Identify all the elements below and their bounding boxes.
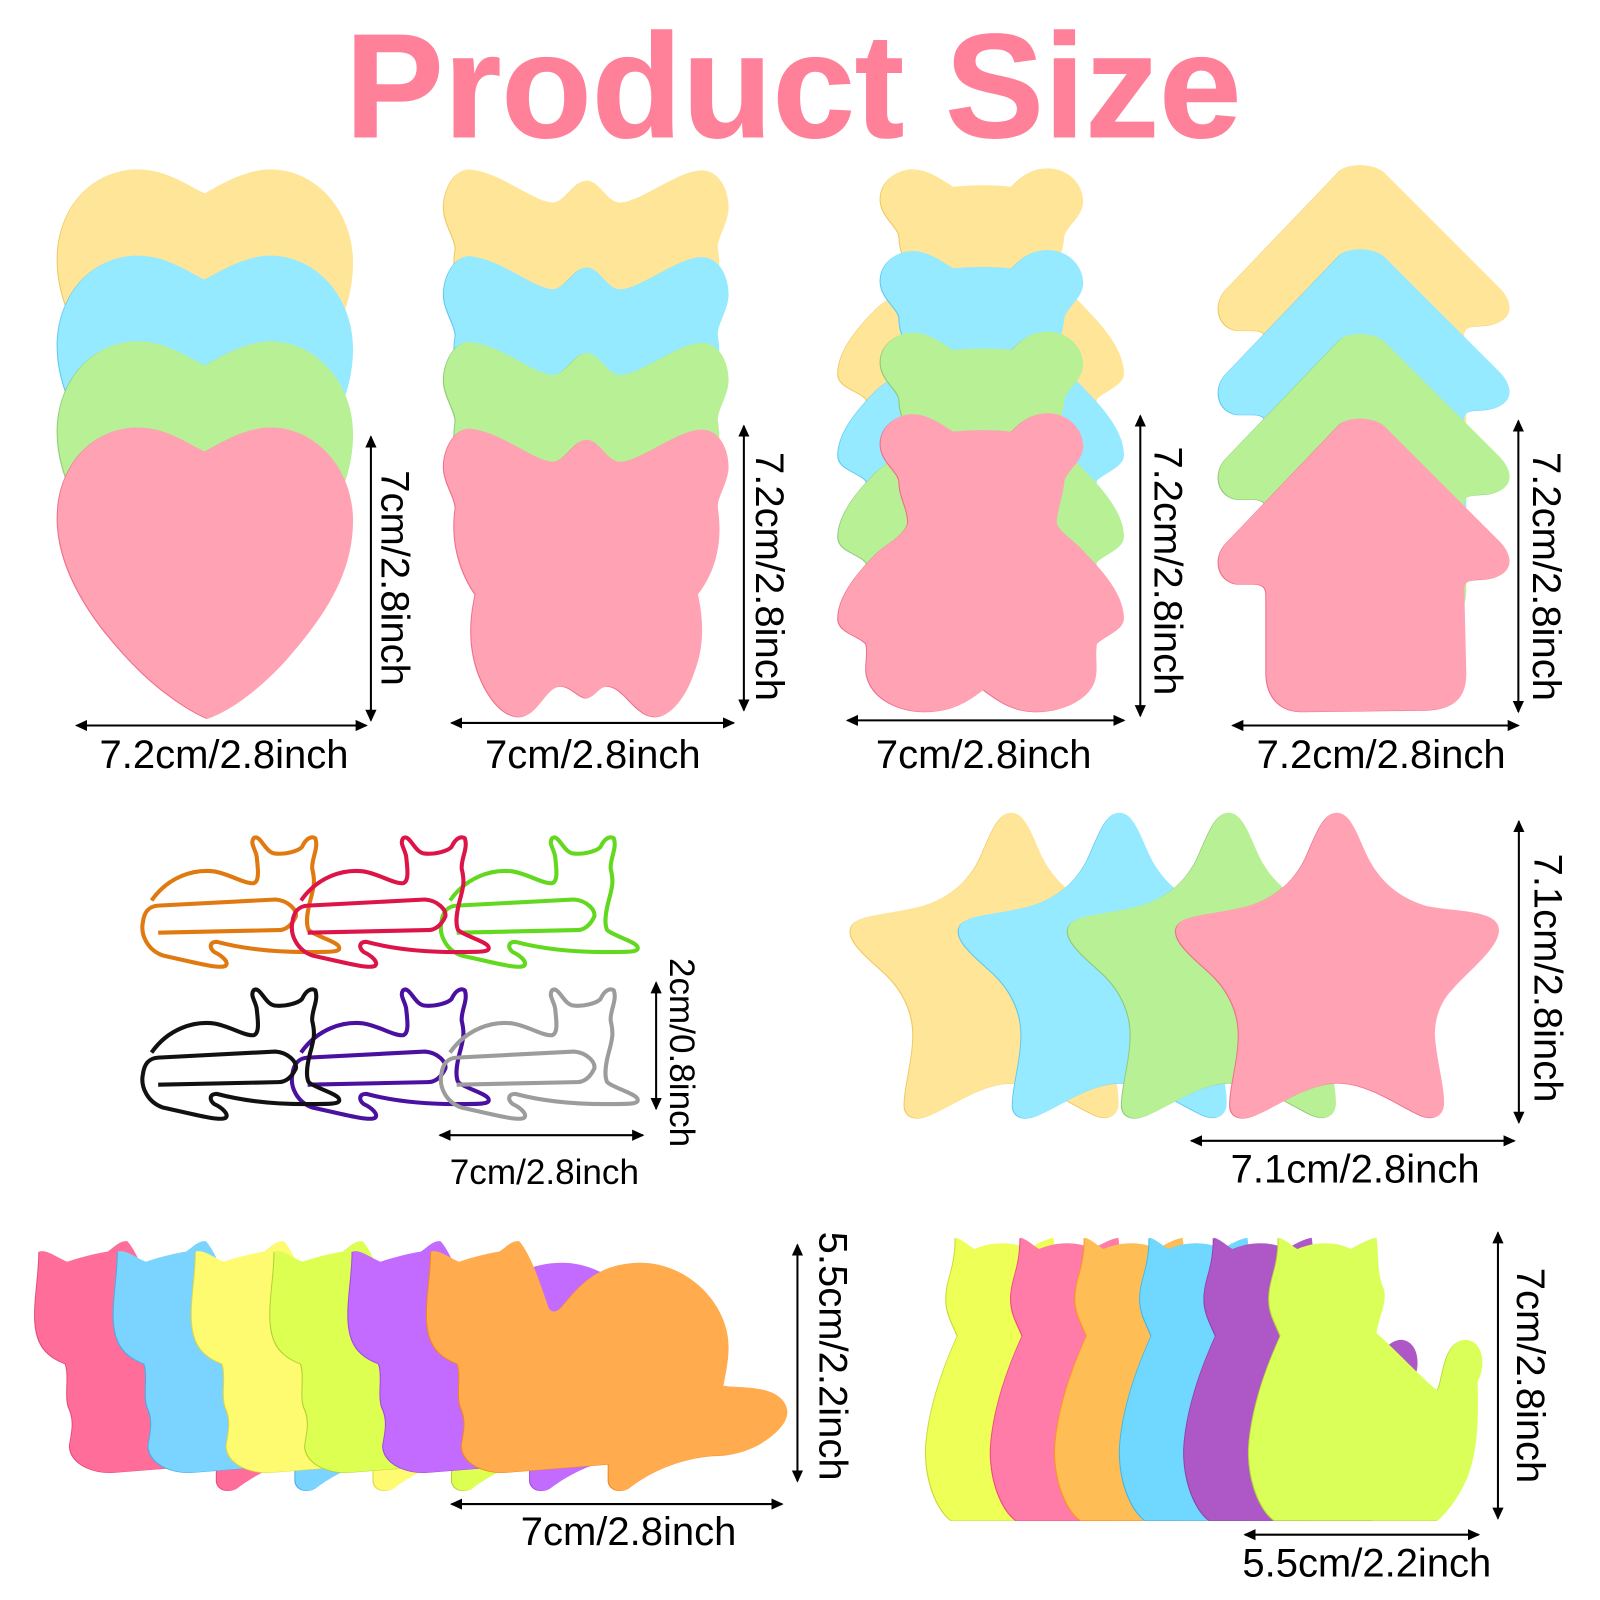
heart notes stack xyxy=(58,169,353,718)
star width dimension: 7.1cm/2.8inch xyxy=(1231,1148,1480,1192)
title: Product Size xyxy=(345,4,1241,169)
lying cat width dimension: 7cm/2.8inch xyxy=(521,1510,736,1554)
bottom-right quadrant xyxy=(851,813,1570,1586)
house height dimension: 7.2cm/2.8inch xyxy=(1524,452,1568,701)
clip height dimension: 2cm/0.8inch xyxy=(662,958,701,1147)
heart width dimension: 7.2cm/2.8inch xyxy=(100,733,348,777)
top-right quadrant xyxy=(838,165,1568,777)
lying cat notes stack xyxy=(35,1241,787,1491)
top-left quadrant xyxy=(58,169,791,777)
cat paper clips, top row xyxy=(142,837,638,967)
butterfly height dimension: 7.2cm/2.8inch xyxy=(747,452,791,701)
heart height dimension: 7cm/2.8inch xyxy=(373,470,417,686)
house notes stack xyxy=(1219,165,1510,712)
cat paper clips, bottom row xyxy=(142,989,638,1119)
house width dimension: 7.2cm/2.8inch xyxy=(1257,733,1506,777)
star notes stack xyxy=(851,813,1499,1118)
bear height dimension: 7.2cm/2.8inch xyxy=(1146,446,1190,695)
bear width dimension: 7cm/2.8inch xyxy=(876,733,1091,777)
butterfly width dimension: 7cm/2.8inch xyxy=(485,733,701,777)
butterfly notes stack xyxy=(444,169,729,717)
sitting cat height dimension: 7cm/2.8inch xyxy=(1508,1268,1552,1483)
lying cat height dimension: 5.5cm/2.2inch xyxy=(810,1232,854,1481)
bear notes stack xyxy=(838,168,1124,712)
sitting cat width dimension: 5.5cm/2.2inch xyxy=(1242,1542,1491,1586)
bottom-left quadrant xyxy=(35,837,854,1554)
sitting cat notes stack xyxy=(926,1238,1482,1520)
star height dimension: 7.1cm/2.8inch xyxy=(1526,854,1570,1103)
clip width dimension: 7cm/2.8inch xyxy=(450,1153,639,1192)
